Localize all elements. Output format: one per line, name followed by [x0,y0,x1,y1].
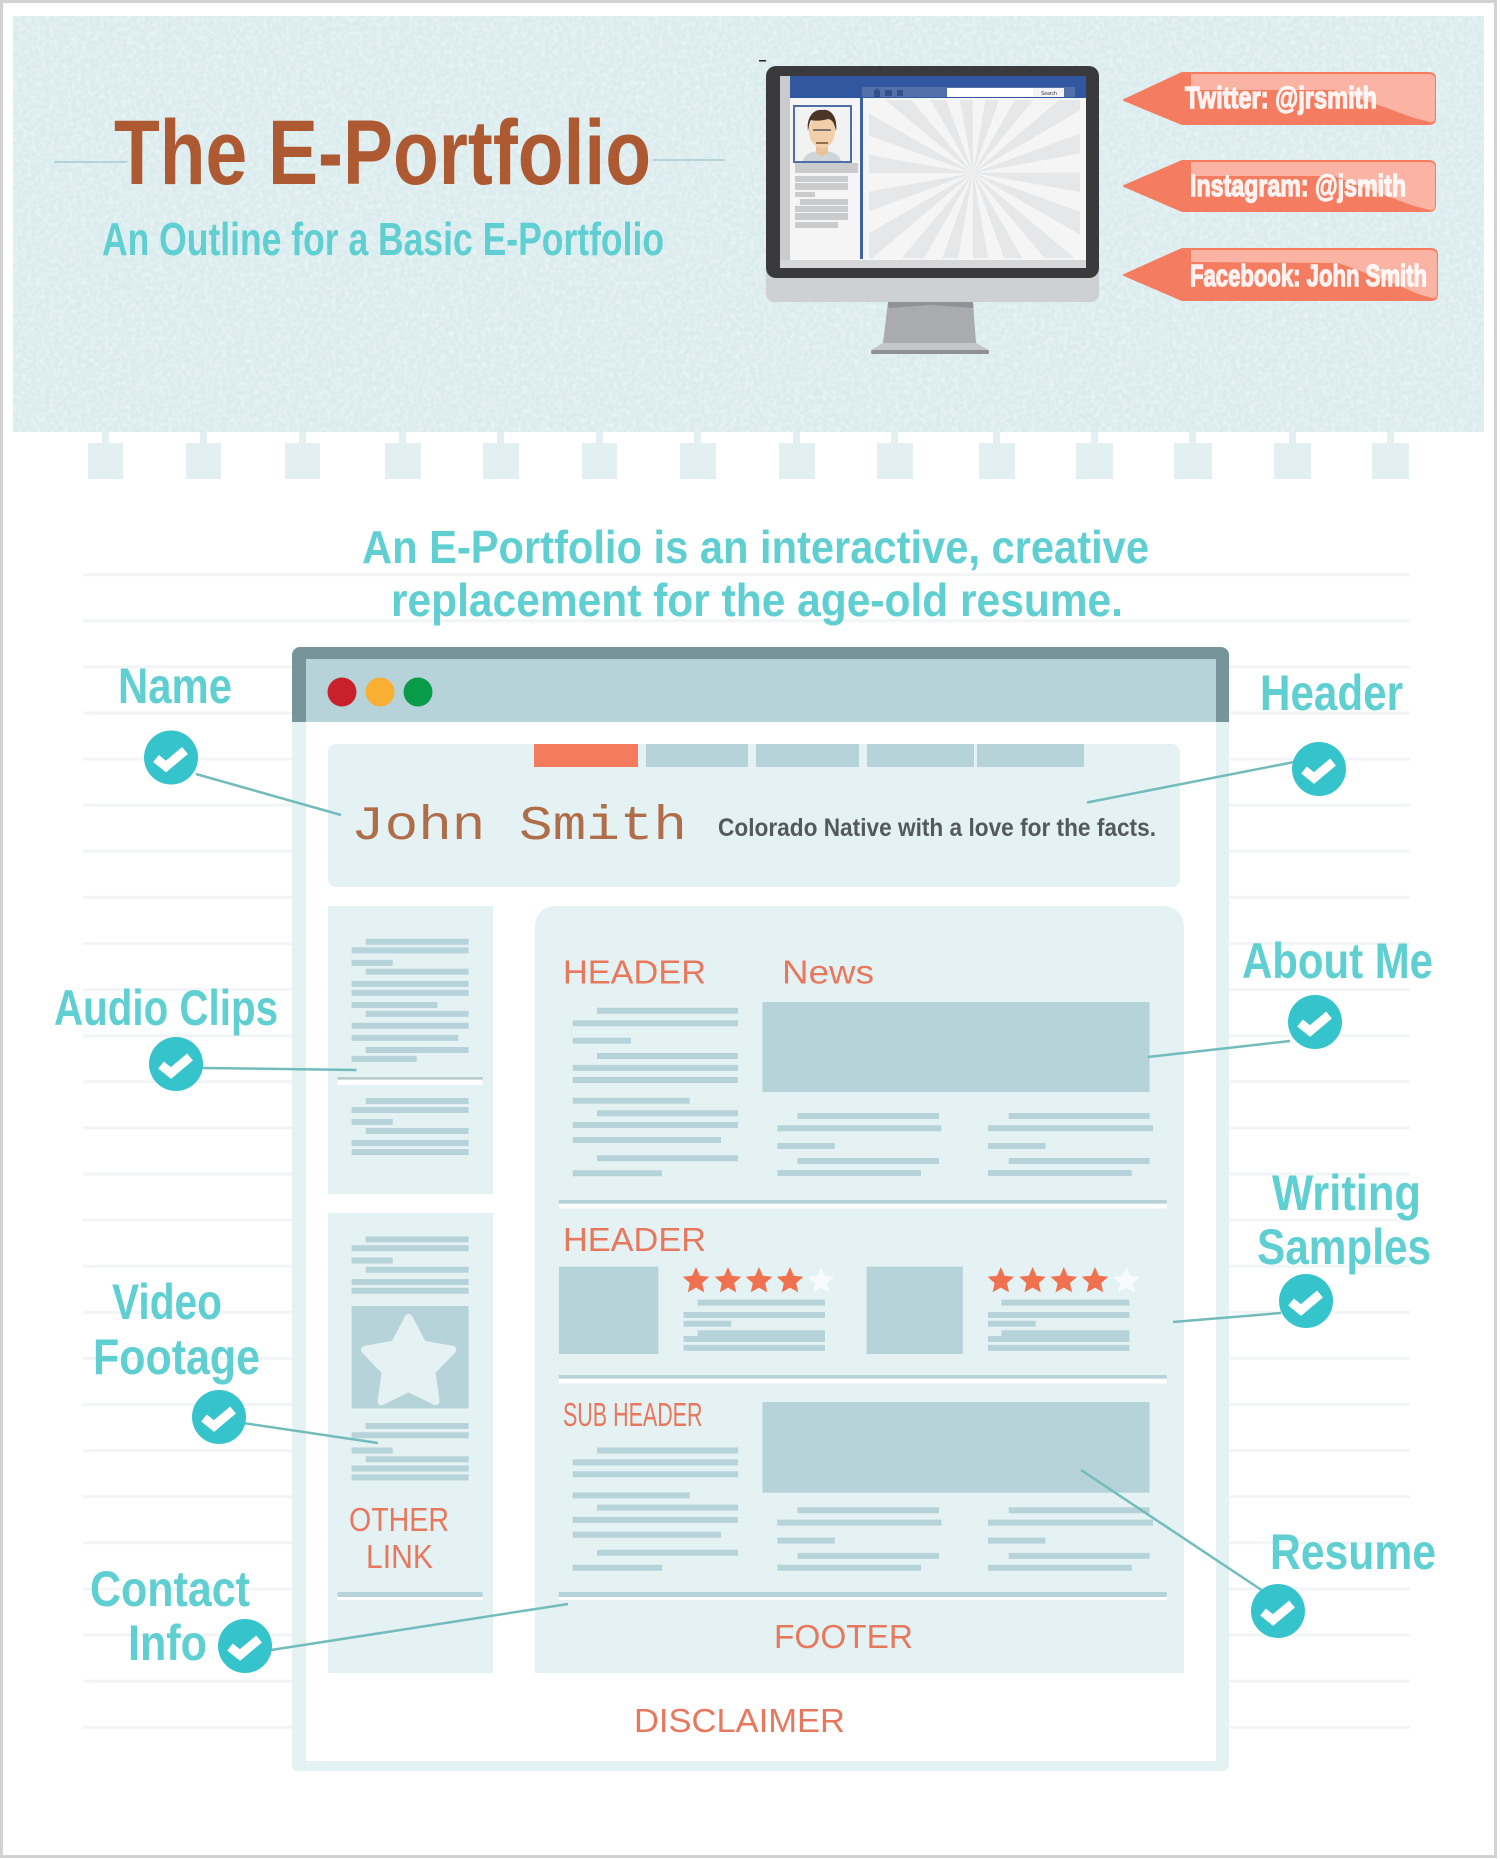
other link label [349,1501,449,1575]
intro statement [362,521,1149,626]
subtitle: An Outline for a Basic E-Portfolio [102,213,664,265]
panel: video sidebar [328,1213,493,1673]
callout: Header: Header [1260,665,1403,721]
panel: main content [535,906,1184,1673]
ribbon: Facebook [1124,249,1437,300]
tagline: Colorado Native with a love for the facts. [718,814,1156,842]
section: news [563,954,1153,1173]
ribbon: Instagram: Instagram: @jsmith [1190,168,1406,203]
callout: Name [118,658,232,784]
callout: Contact Info [90,1561,272,1673]
callout: Writing Samples: Writing [1272,1165,1421,1221]
callout: Video Footage: Footage [93,1329,260,1385]
background ruled lines [83,575,1410,1727]
callout: Video Footage: Video [112,1274,222,1330]
callout: About Me [1242,933,1433,1049]
callout: Resume: Resume [1270,1524,1436,1580]
header banner [13,16,1484,432]
name: John Smith [351,800,687,854]
section: sub header [563,1396,1153,1568]
intro statement: replacement for the age-old resume. [391,574,1123,626]
section: rated items: HEADER [563,1221,706,1258]
callout: Name: Name [118,658,232,714]
video thumbnail with star [352,1306,469,1408]
ribbon: Twitter [1124,73,1435,124]
icon: desktop monitor with profile page: Search [1041,91,1057,97]
browser title bar [292,647,1229,722]
text lines [352,942,469,1152]
callout: Audio Clips [54,980,278,1091]
panel: audio sidebar [328,906,493,1194]
title rules [54,160,724,162]
panel: page header [328,744,1180,887]
disclaimer label: DISCLAIMER [634,1702,845,1739]
callout: Writing Samples: Samples [1257,1219,1431,1275]
panel: browser window [292,647,1229,1771]
leader lines [196,762,1294,1650]
section: news: News [782,954,874,991]
callout: Contact Info: Info [128,1615,207,1671]
callout: Video Footage [93,1274,260,1444]
intro statement: An E-Portfolio is an interactive, creative [362,521,1149,573]
section: rated items [559,1221,1140,1354]
text lines [352,1239,469,1477]
ribbon: Twitter: Twitter: @jrsmith [1185,80,1377,115]
other link label: OTHER [349,1501,449,1538]
star ratings [683,1267,1140,1292]
ribbon: Instagram [1124,161,1435,211]
window buttons [328,678,432,706]
navigation tabs [534,744,1084,767]
other link label: LINK [366,1538,433,1575]
title: The E-Portfolio [114,102,651,204]
callout: Header [1260,665,1403,796]
section: news: HEADER [563,954,706,991]
callout: Resume [1251,1524,1436,1638]
hanging tabs [88,432,1409,479]
callout: Writing Samples [1257,1165,1431,1328]
footer label: FOOTER [774,1618,913,1655]
callout: About Me: About Me [1242,933,1433,989]
section: sub header: SUB HEADER [563,1396,702,1433]
callout: Audio Clips: Audio Clips [54,980,278,1036]
icon: desktop monitor with profile page [759,60,1099,354]
callout: Contact Info: Contact [90,1561,250,1617]
